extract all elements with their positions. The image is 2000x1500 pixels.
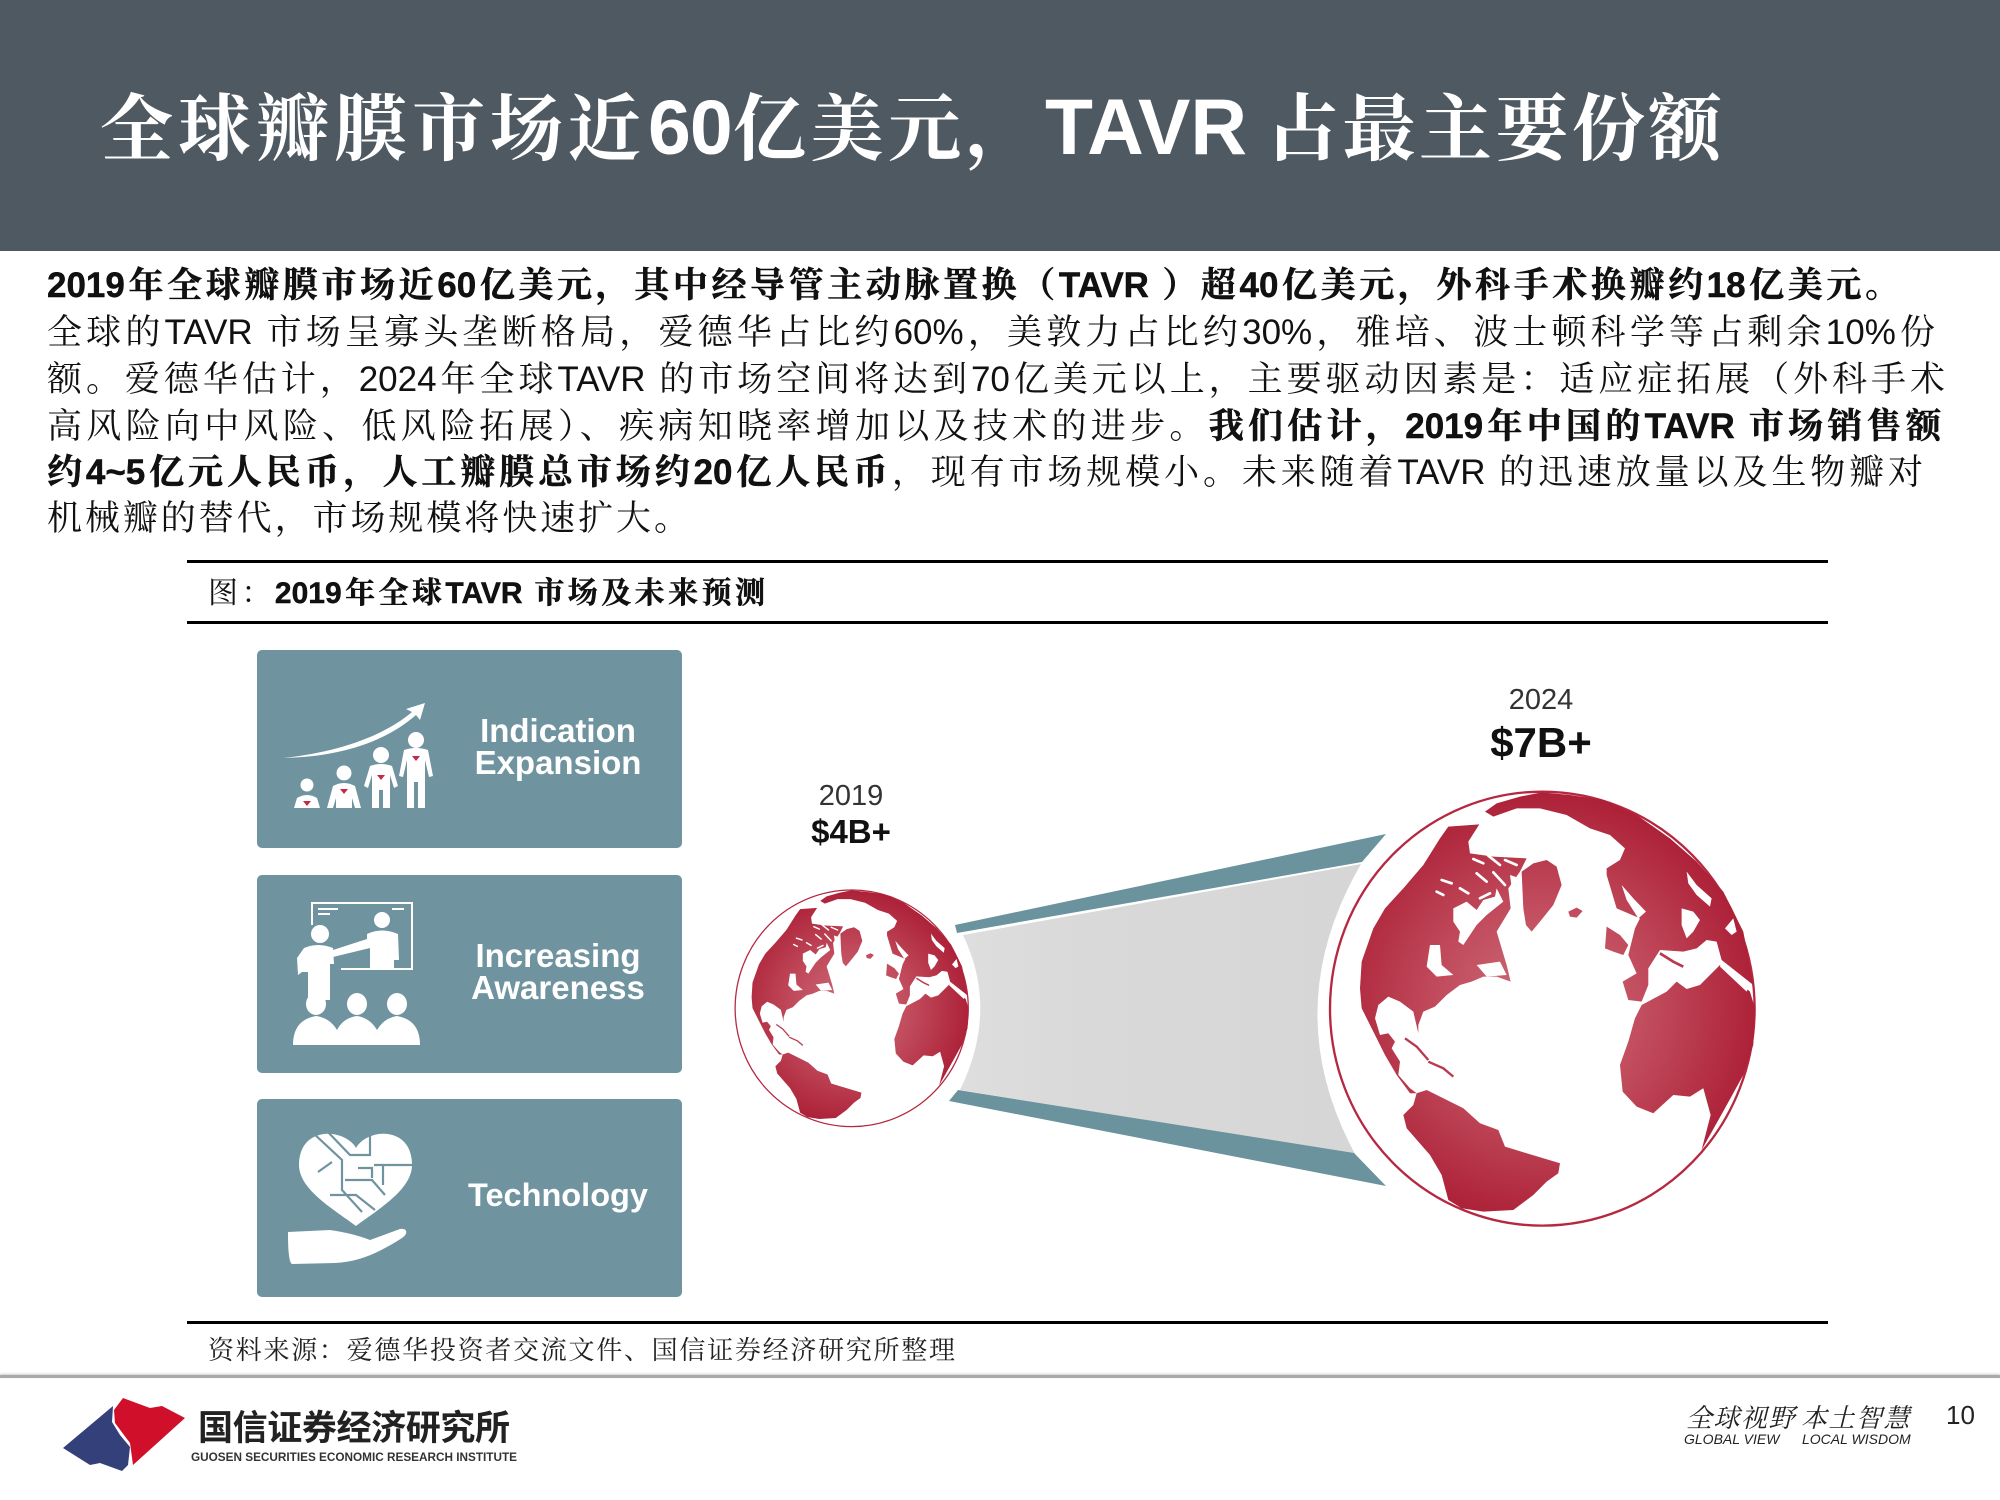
card: Indication Expansion: Indication — [480, 712, 636, 749]
slogan: 全球视野 — [1686, 1404, 1796, 1433]
slogan: LOCAL WISDOM — [1802, 1431, 1911, 1447]
body text: 高风险向中风险、低风险拓展）、疾病知晓率增加以及技术的进步。我们估计，2019年中国的TAVR 市场销售额 — [47, 407, 1941, 446]
card: Indication Expansion — [257, 650, 682, 848]
slogan — [1684, 1404, 1913, 1447]
card: Increasing Awareness — [257, 875, 682, 1073]
body text: 全球的TAVR 市场呈寡头垄断格局，爱德华占比约60%，美敦力占比约30%，雅培、波士顿科学等占剩余10%份 — [47, 313, 1935, 352]
title — [100, 83, 1725, 171]
footer divider — [0, 1375, 2000, 1378]
logo: 国信证券经济研究所 — [198, 1409, 510, 1448]
card: Technology — [257, 1099, 682, 1297]
title: 全球瓣膜市场近 — [100, 89, 646, 170]
globe 2024 — [1330, 792, 1755, 1226]
card: Increasing Awareness: Increasing — [475, 937, 641, 974]
header band — [0, 0, 2000, 251]
title: 亿美元， — [733, 89, 1043, 171]
card: Increasing Awareness: Awareness — [471, 969, 645, 1006]
slogan: GLOBAL VIEW — [1684, 1431, 1781, 1447]
figure title: 图：2019年全球TAVR 市场及未来预测 — [208, 577, 765, 610]
label 2024: $7B+ — [1490, 719, 1592, 766]
body text: 机械瓣的替代，市场规模将快速扩大。 — [47, 499, 689, 538]
title: 60 — [648, 85, 732, 171]
globe 2019 — [735, 890, 968, 1127]
label 2019: 2019 — [819, 780, 883, 812]
funnel between globes — [949, 834, 1386, 1186]
title: 占最主要份额 — [1266, 89, 1725, 170]
body text: 额。爱德华估计，2024年全球TAVR 的市场空间将达到70亿美元以上，主要驱动因素是：适应症拓展（外科手术 — [47, 360, 1945, 399]
title: TAVR — [1045, 83, 1247, 171]
label 2024: 2024 — [1509, 684, 1573, 716]
page number: 10 — [1946, 1400, 1975, 1430]
slogan: 本土智慧 — [1801, 1404, 1913, 1433]
label 2019 — [811, 780, 891, 850]
icon: doctor teaching — [293, 902, 420, 1045]
label 2019: $4B+ — [811, 813, 891, 850]
body text: 2019年全球瓣膜市场近60亿美元，其中经导管主动脉置换（TAVR ）超40亿美元，外科手术换瓣约18亿美元。 — [47, 266, 1900, 305]
logo: GUOSEN SECURITIES ECONOMIC RESEARCH INSTITUTE — [191, 1450, 517, 1464]
body text — [47, 266, 1945, 538]
card: Indication Expansion: Expansion — [475, 744, 641, 781]
logo — [63, 1398, 517, 1471]
body text: 约4~5亿元人民币，人工瓣膜总市场约20亿人民币，现有市场规模小。未来随着TAVR 的迅速放量以及生物瓣对 — [47, 453, 1923, 492]
icon: people growth — [283, 703, 433, 808]
icon: heart and hand — [288, 1130, 412, 1264]
source note: 资料来源：爱德华投资者交流文件、国信证券经济研究所整理 — [208, 1335, 955, 1365]
card: Technology: Technology — [468, 1177, 648, 1213]
label 2024 — [1490, 684, 1592, 766]
